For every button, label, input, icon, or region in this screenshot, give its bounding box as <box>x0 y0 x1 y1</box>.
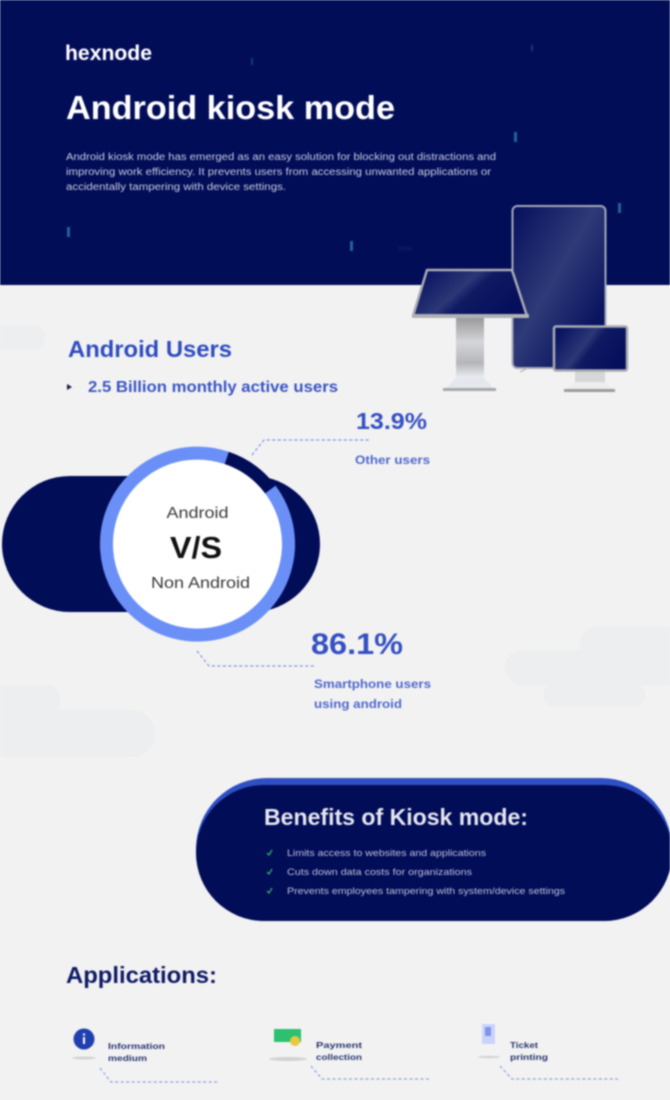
benefit list: Prevents employees tampering with system/device settings <box>287 886 565 897</box>
header band <box>0 0 670 285</box>
callout: 13.9% other users <box>252 408 430 467</box>
title: Android kiosk mode <box>66 89 395 126</box>
donut centre labels <box>151 505 250 592</box>
heading: Android Users: Android Users <box>68 336 232 362</box>
callout: 86.1% android users: 86.1% <box>311 628 403 661</box>
benefit list <box>267 848 565 897</box>
benefits heading: Benefits of Kiosk mode: <box>264 804 528 830</box>
intro paragraph: Android kiosk mode has emerged as an easy solution for blocking out distractions and <box>66 152 496 163</box>
device: small monitor <box>554 326 627 392</box>
intro paragraph: accidentally tampering with device settings. <box>66 182 286 193</box>
application: payment collection: Payment <box>316 1040 362 1050</box>
application: ticket printing: printing <box>510 1052 548 1062</box>
logo: hexnode: hexnode <box>65 42 152 65</box>
icon: info <box>72 1028 96 1060</box>
device: table kiosk <box>412 270 529 391</box>
icon: ticket <box>478 1024 500 1058</box>
donut disc <box>112 459 282 629</box>
intro paragraph: improving work efficiency. It prevents users from accessing unwanted applications or <box>66 167 492 178</box>
donut segment: android 86.1% <box>106 453 288 635</box>
benefit list: Cuts down data costs for organizations <box>287 867 472 878</box>
chart: Android vs Non Android donut <box>2 453 320 635</box>
callout: 13.9% other users: Other users <box>355 453 430 467</box>
panel: benefits of kiosk mode <box>196 778 670 921</box>
application: information medium <box>72 1028 218 1082</box>
panel body <box>196 785 670 921</box>
intro paragraph <box>66 152 496 193</box>
donut centre labels: V/S <box>170 530 222 565</box>
application: payment collection: collection <box>316 1052 362 1062</box>
benefit list: Limits access to websites and applications <box>287 848 486 859</box>
donut centre labels: Non Android <box>151 575 250 592</box>
callout: 86.1% android users <box>197 628 431 711</box>
navy pill behind donut <box>2 476 320 612</box>
application: information medium: medium <box>108 1053 148 1063</box>
header sparkles <box>67 45 621 251</box>
panel blue edge <box>196 778 670 921</box>
icon: banknote and coin <box>269 1029 307 1061</box>
donut centre labels: Android <box>166 505 228 522</box>
illustration: kiosk devices <box>412 206 627 392</box>
application: ticket printing: Ticket <box>510 1040 538 1050</box>
stat bullet: monthly active users: 2.5 Billion monthly active users <box>88 379 338 396</box>
callout: 13.9% other users: 13.9% <box>356 408 427 434</box>
donut segment: other 13.9% <box>227 458 270 490</box>
callout: 86.1% android users: using android <box>314 697 402 711</box>
application: payment collection <box>269 1029 430 1079</box>
callout: 86.1% android users: Smartphone users <box>314 677 431 691</box>
application: ticket printing <box>478 1024 618 1079</box>
decorative background blobs <box>0 325 670 757</box>
application: information medium: Information <box>108 1041 165 1051</box>
heading: Applications: Applications: <box>66 962 217 988</box>
device: tablet kiosk <box>512 206 606 372</box>
